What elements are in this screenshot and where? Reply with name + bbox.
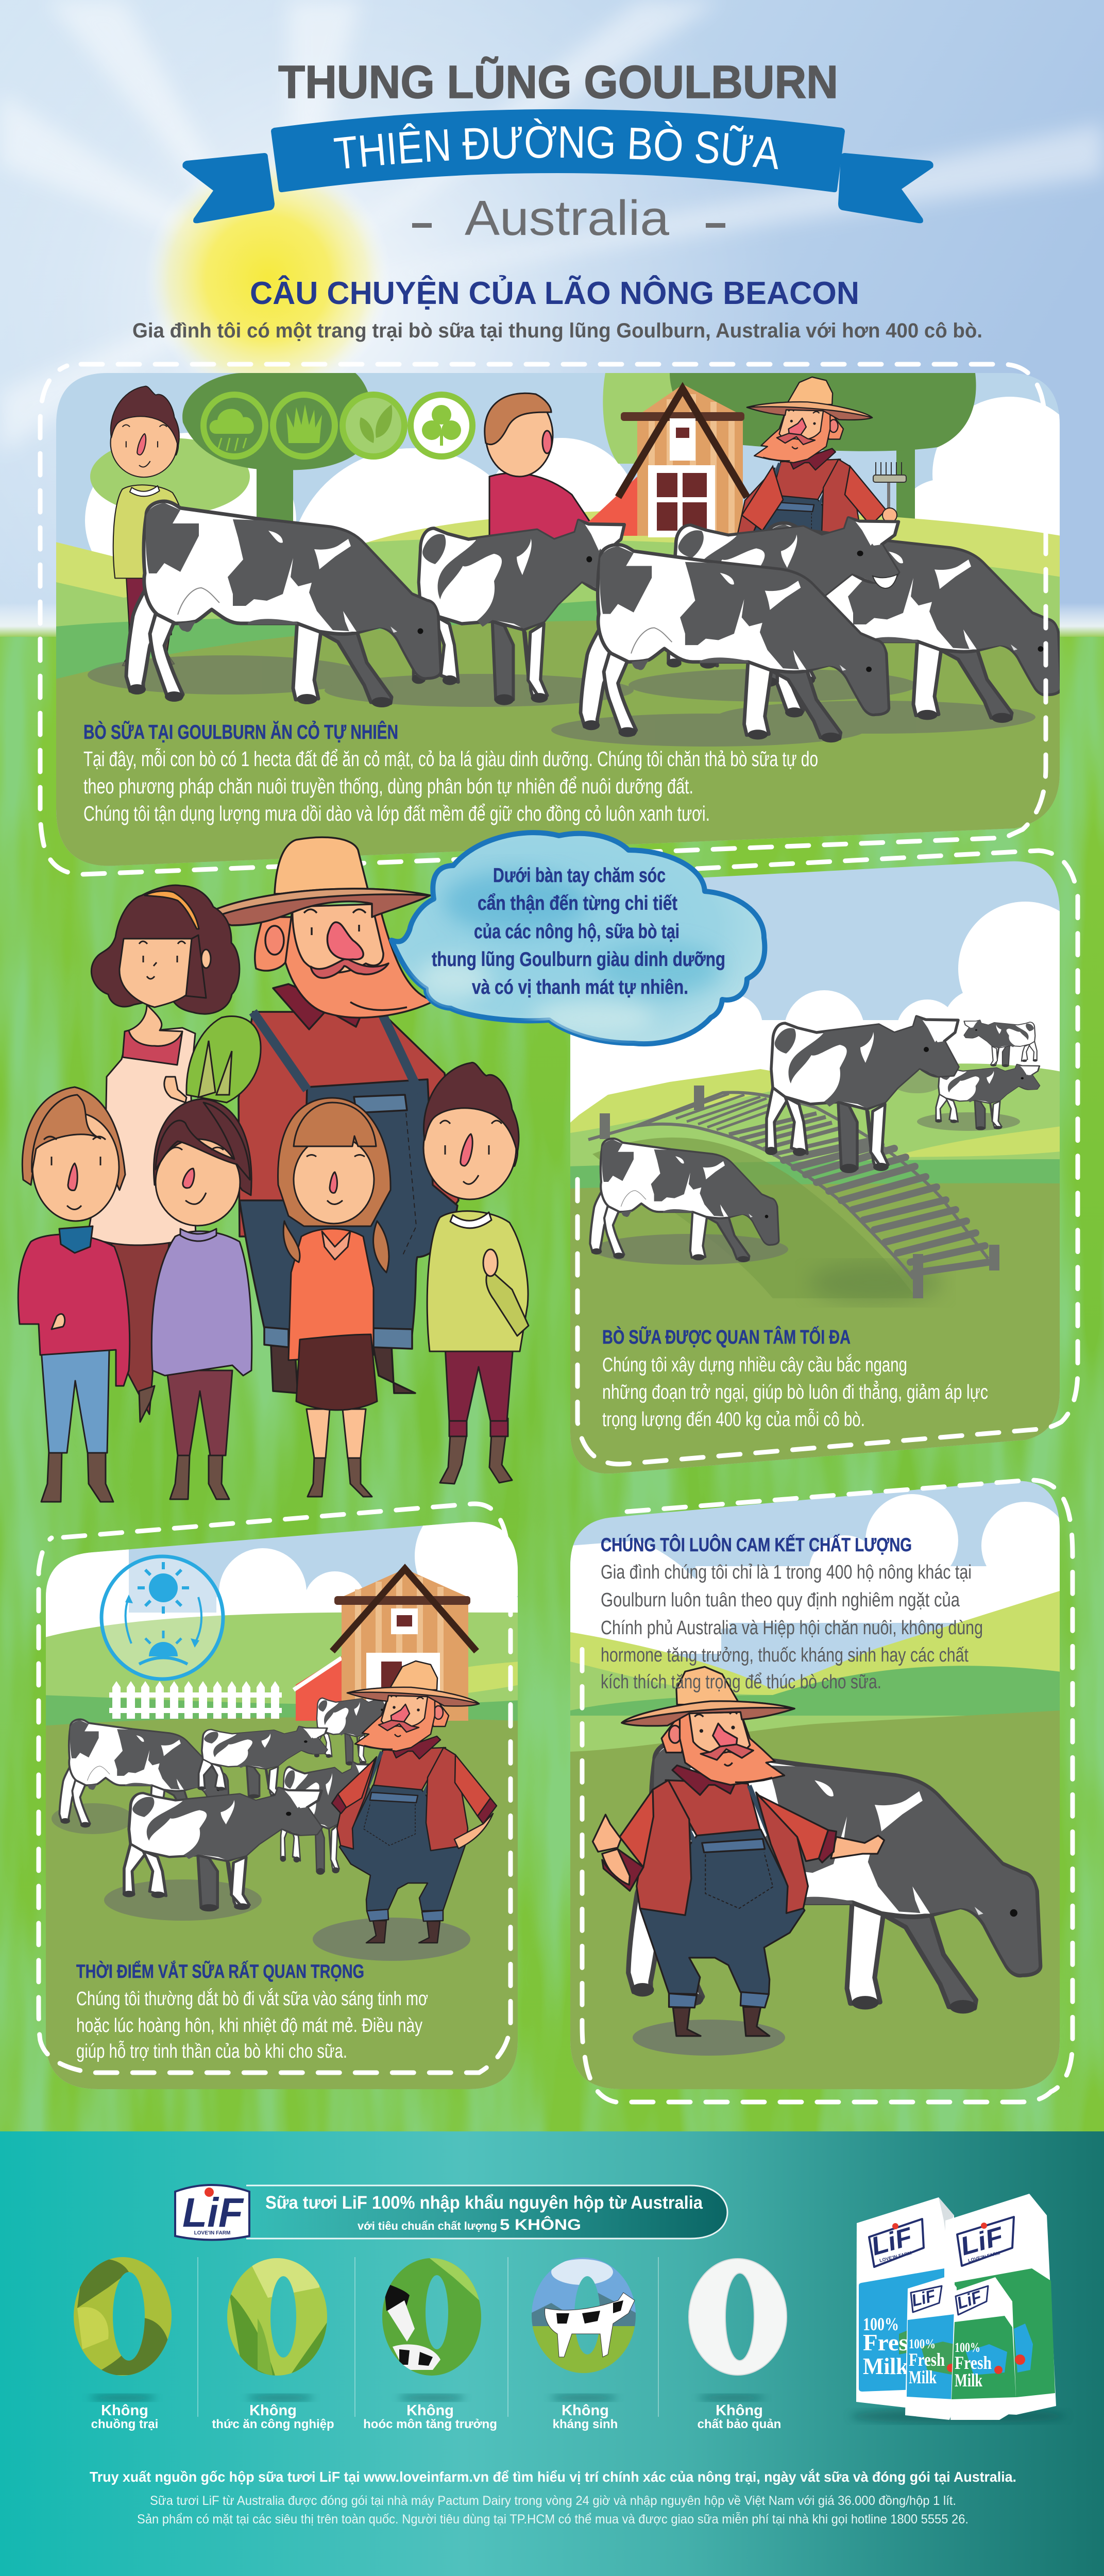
label: no barns — [91, 2402, 158, 2431]
kid in red sweater — [18, 1087, 130, 1502]
bubble text — [432, 865, 725, 998]
dashed frame — [40, 364, 1046, 874]
label: no preservatives: Không — [716, 2402, 763, 2419]
milk cartons — [850, 2194, 1066, 2424]
traceability text: Truy xuất nguồn gốc hộp sữa tươi LiF tại www.loveinfarm.vn để tìm hiểu vị trí chính xác của nông trại, ngày vắt sữa và đóng gói tại Australia. — [90, 2469, 1016, 2485]
bridge — [588, 1086, 994, 1298]
carton: large green: LiF — [957, 2221, 1007, 2261]
bubble text: và có vị thanh mát tự nhiên. — [472, 976, 688, 998]
intro text: Gia đình tôi có một trang trại bò sữa tại thung lũng Goulburn, Australia với hơn 400 cô bò. — [132, 319, 982, 342]
cows on bridge — [765, 1016, 958, 1173]
ring: farm — [72, 2256, 173, 2377]
hills — [570, 1590, 1061, 2092]
panel body text: hormone tăng trưởng, thuốc kháng sinh hay các chất — [601, 1645, 969, 1666]
carton: large blue: Fres — [863, 2329, 908, 2355]
footer note line two: Sản phẩm có mặt tại các siêu thị trên toàn quốc. Người tiêu dùng tại TP.HCM có thể mua và được giao sữa miễn phí tại nhà khi gọi hotline 1800 5555 26. — [137, 2512, 969, 2527]
ring: milk — [689, 2259, 787, 2375]
label: no industrial feed: Không — [249, 2402, 297, 2419]
label: no antibiotics: kháng sinh — [553, 2417, 618, 2431]
panel body text — [76, 1988, 428, 2062]
back cows — [964, 1020, 1038, 1067]
carton: large blue: Milk — [863, 2353, 908, 2379]
carton: small green: Milk — [955, 2370, 982, 2391]
fence — [109, 1681, 282, 1719]
panel body text: kích thích tăng trọng để thúc bò cho sữa. — [601, 1671, 881, 1693]
dashed frame — [578, 851, 1078, 1464]
mother's hand — [164, 1077, 186, 1103]
icon: grass — [273, 395, 335, 456]
title: THUNG LŨNG GOULBURN — [278, 56, 838, 108]
kid with green sweater — [111, 386, 186, 666]
ring shadows — [89, 2394, 765, 2401]
footer note line one: Sữa tươi LiF từ Australia được đóng gói tại nhà máy Pactum Dairy trong vòng 24 giờ và nhập nguyên hộp về Việt Nam với giá 36.000 đồng/hộp 1 lít. — [150, 2494, 956, 2508]
bubble text: Dưới bàn tay chăm sóc — [493, 865, 666, 887]
label: no barns: chuồng trại — [91, 2417, 158, 2431]
ring: cow in valley — [531, 2257, 637, 2378]
LiF logo — [175, 2185, 249, 2240]
shadows — [592, 1071, 1020, 1303]
herd — [52, 1695, 395, 1921]
panel scene: barn and herd — [41, 1497, 533, 2094]
label: no antibiotics — [553, 2402, 618, 2431]
panel body text — [601, 1562, 983, 1693]
cow smile — [873, 574, 897, 588]
panel scene: bridge and cows — [567, 855, 1092, 1484]
icon: leaf — [343, 395, 404, 456]
icon: sun cycle — [101, 1556, 223, 1679]
kid with red sweater — [485, 393, 592, 567]
label: no antibiotics: Không — [562, 2402, 609, 2419]
farmer — [313, 1661, 497, 1961]
carton: small green — [950, 2277, 1016, 2420]
ribbon banner — [182, 109, 933, 224]
ring: grass — [226, 2257, 330, 2378]
farmer thumbs up — [592, 1667, 884, 2056]
panel heading: BÒ SỮA TẠI GOULBURN ĂN CỎ TỰ NHIÊN — [83, 721, 398, 743]
cow — [629, 1741, 1040, 2013]
bubble text: của các nông hộ, sữa bò tại — [474, 921, 680, 943]
carton: small blue: Milk — [909, 2367, 937, 2387]
kid in orange top — [278, 1098, 390, 1497]
carton: small green: 100% — [955, 2340, 980, 2355]
panel body text — [83, 747, 818, 825]
product headline pill — [246, 2185, 727, 2239]
kid in purple sweater — [151, 1099, 252, 1499]
carton: large blue: LOVE'IN FARM — [879, 2250, 912, 2263]
label: no industrial feed — [212, 2402, 334, 2431]
panel scene: farmer with cow — [567, 1473, 1069, 2094]
carton: small blue: Fresh — [909, 2349, 945, 2370]
dividers — [198, 2257, 658, 2417]
carton: large blue: 100% — [863, 2314, 899, 2334]
label: no industrial feed: thức ăn công nghiệp — [212, 2417, 334, 2431]
farmer with rake — [737, 377, 906, 645]
label: no growth hormone — [363, 2402, 497, 2431]
carton: small green: LiF — [955, 2286, 984, 2313]
label: no preservatives: chất bảo quản — [698, 2417, 781, 2431]
ribbon banner: THIÊN ĐƯỜNG BÒ SỮA — [334, 118, 778, 169]
mother — [88, 885, 240, 1422]
barn — [585, 384, 747, 537]
dashed frame — [39, 1504, 511, 2073]
panel: bridges — [567, 851, 1092, 1484]
carton: large green: LOVE'IN FARM — [967, 2250, 1000, 2263]
watercolor washes — [417, 871, 721, 1036]
panel body text: trọng lượng đến 400 kg của mỗi cô bò. — [602, 1409, 865, 1431]
five no's: 5 KHÔNG — [500, 2216, 581, 2233]
icon: clover — [411, 395, 472, 456]
panel body text: Tại đây, mỗi con bò có 1 hecta đất để ăn cỏ mật, cỏ ba lá giàu dinh dưỡng. Chúng tôi chăn thả bò sữa tự do — [83, 747, 818, 771]
bubble text: cẩn thận đến từng chi tiết — [478, 892, 677, 914]
trees — [90, 373, 976, 526]
icon: rain — [203, 395, 265, 456]
panel body text: Chúng tôi tận dụng lượng mưa dồi dào và lớp đất mềm để giữ cho đồng cỏ luôn xanh tươi. — [83, 802, 710, 825]
label: no barns: Không — [101, 2402, 148, 2419]
farmer large — [213, 837, 458, 1393]
subtitle Australia — [412, 191, 725, 246]
hills — [52, 510, 1061, 876]
headline text: Sữa tươi LiF 100% nhập khẩu nguyên hộp từ Australia — [265, 2193, 703, 2213]
label: no preservatives — [698, 2402, 781, 2431]
carton: small blue: LiF — [910, 2286, 938, 2310]
LiF logo: LOVE'IN FARM — [194, 2230, 230, 2236]
panel body text: Gia đình chúng tôi chỉ là 1 trong 400 hộ nông khác tại — [601, 1562, 972, 1583]
barn — [294, 1569, 477, 1721]
carton: large blue — [856, 2197, 954, 2408]
panel: quality commitment — [567, 1473, 1073, 2102]
LiF logo: LiF — [182, 2190, 244, 2235]
dashed frame — [582, 1480, 1073, 2102]
lettuce — [186, 1016, 261, 1103]
label: no growth hormone: Không — [406, 2402, 454, 2419]
heading: farmer story: CÂU CHUYỆN CỦA LÃO NÔNG BEACON — [250, 276, 859, 311]
subheadline text: với tiêu chuẩn chất lượng — [358, 2219, 497, 2232]
footer panel — [0, 2131, 1104, 2576]
carton: large blue: LiF — [868, 2222, 916, 2261]
panel heading: BÒ SỮA ĐƯỢC QUAN TÂM TỐI ĐA — [602, 1325, 851, 1348]
carton: small blue — [905, 2276, 957, 2420]
panel body text: theo phương pháp chăn nuôi truyền thống, dùng phân bón tự nhiên để nuôi dưỡng đất. — [83, 774, 693, 798]
cows herd — [126, 501, 1061, 742]
carton: large green — [945, 2194, 1056, 2415]
ground shadows — [88, 655, 1035, 747]
subtitle Australia: Australia — [465, 191, 670, 246]
panel heading: THỜI ĐIỂM VẮT SỮA RẤT QUAN TRỌNG — [76, 1960, 364, 1982]
panel scene: farm with cows — [52, 368, 1087, 876]
panel heading: CHÚNG TÔI LUÔN CAM KẾT CHẤT LƯỢNG — [601, 1534, 912, 1555]
panel body text: giúp hỗ trợ tinh thần của bò khi cho sữa. — [76, 2040, 347, 2062]
panel body text — [602, 1354, 988, 1431]
carton: small green: Fresh — [955, 2352, 992, 2373]
family illustration — [18, 837, 529, 1502]
bubble text: thung lũng Goulburn giàu dinh dưỡng — [432, 948, 725, 971]
label: no growth hormone: hoóc môn tăng trưởng — [363, 2417, 497, 2431]
kid in green sweater — [423, 1062, 529, 1484]
panel body text: những đoạn trở ngại, giúp bò luôn đi thẳng, giảm áp lực — [602, 1381, 988, 1403]
panel: milking time — [39, 1497, 533, 2094]
panel body text: Goulburn luôn tuân theo quy định nghiêm ngặt của — [601, 1589, 960, 1611]
hills — [567, 1063, 1061, 1484]
hills — [41, 1612, 520, 2092]
speech bubble — [392, 833, 765, 1044]
panel body text: Chúng tôi xây dựng nhiều cây cầu bắc ngang — [602, 1354, 907, 1376]
carton: small blue: 100% — [909, 2336, 936, 2351]
panel body text: Chính phủ Australia và Hiệp hội chăn nuôi, không dùng — [601, 1617, 983, 1639]
panel body text: Chúng tôi thường dắt bò đi vắt sữa vào sáng tinh mơ — [76, 1988, 428, 2010]
panel body text: hoặc lúc hoàng hôn, khi nhiệt độ mát mẻ. Điều này — [76, 2015, 422, 2037]
ring: cow on field — [381, 2257, 482, 2378]
panel: natural grazing — [40, 364, 1087, 876]
